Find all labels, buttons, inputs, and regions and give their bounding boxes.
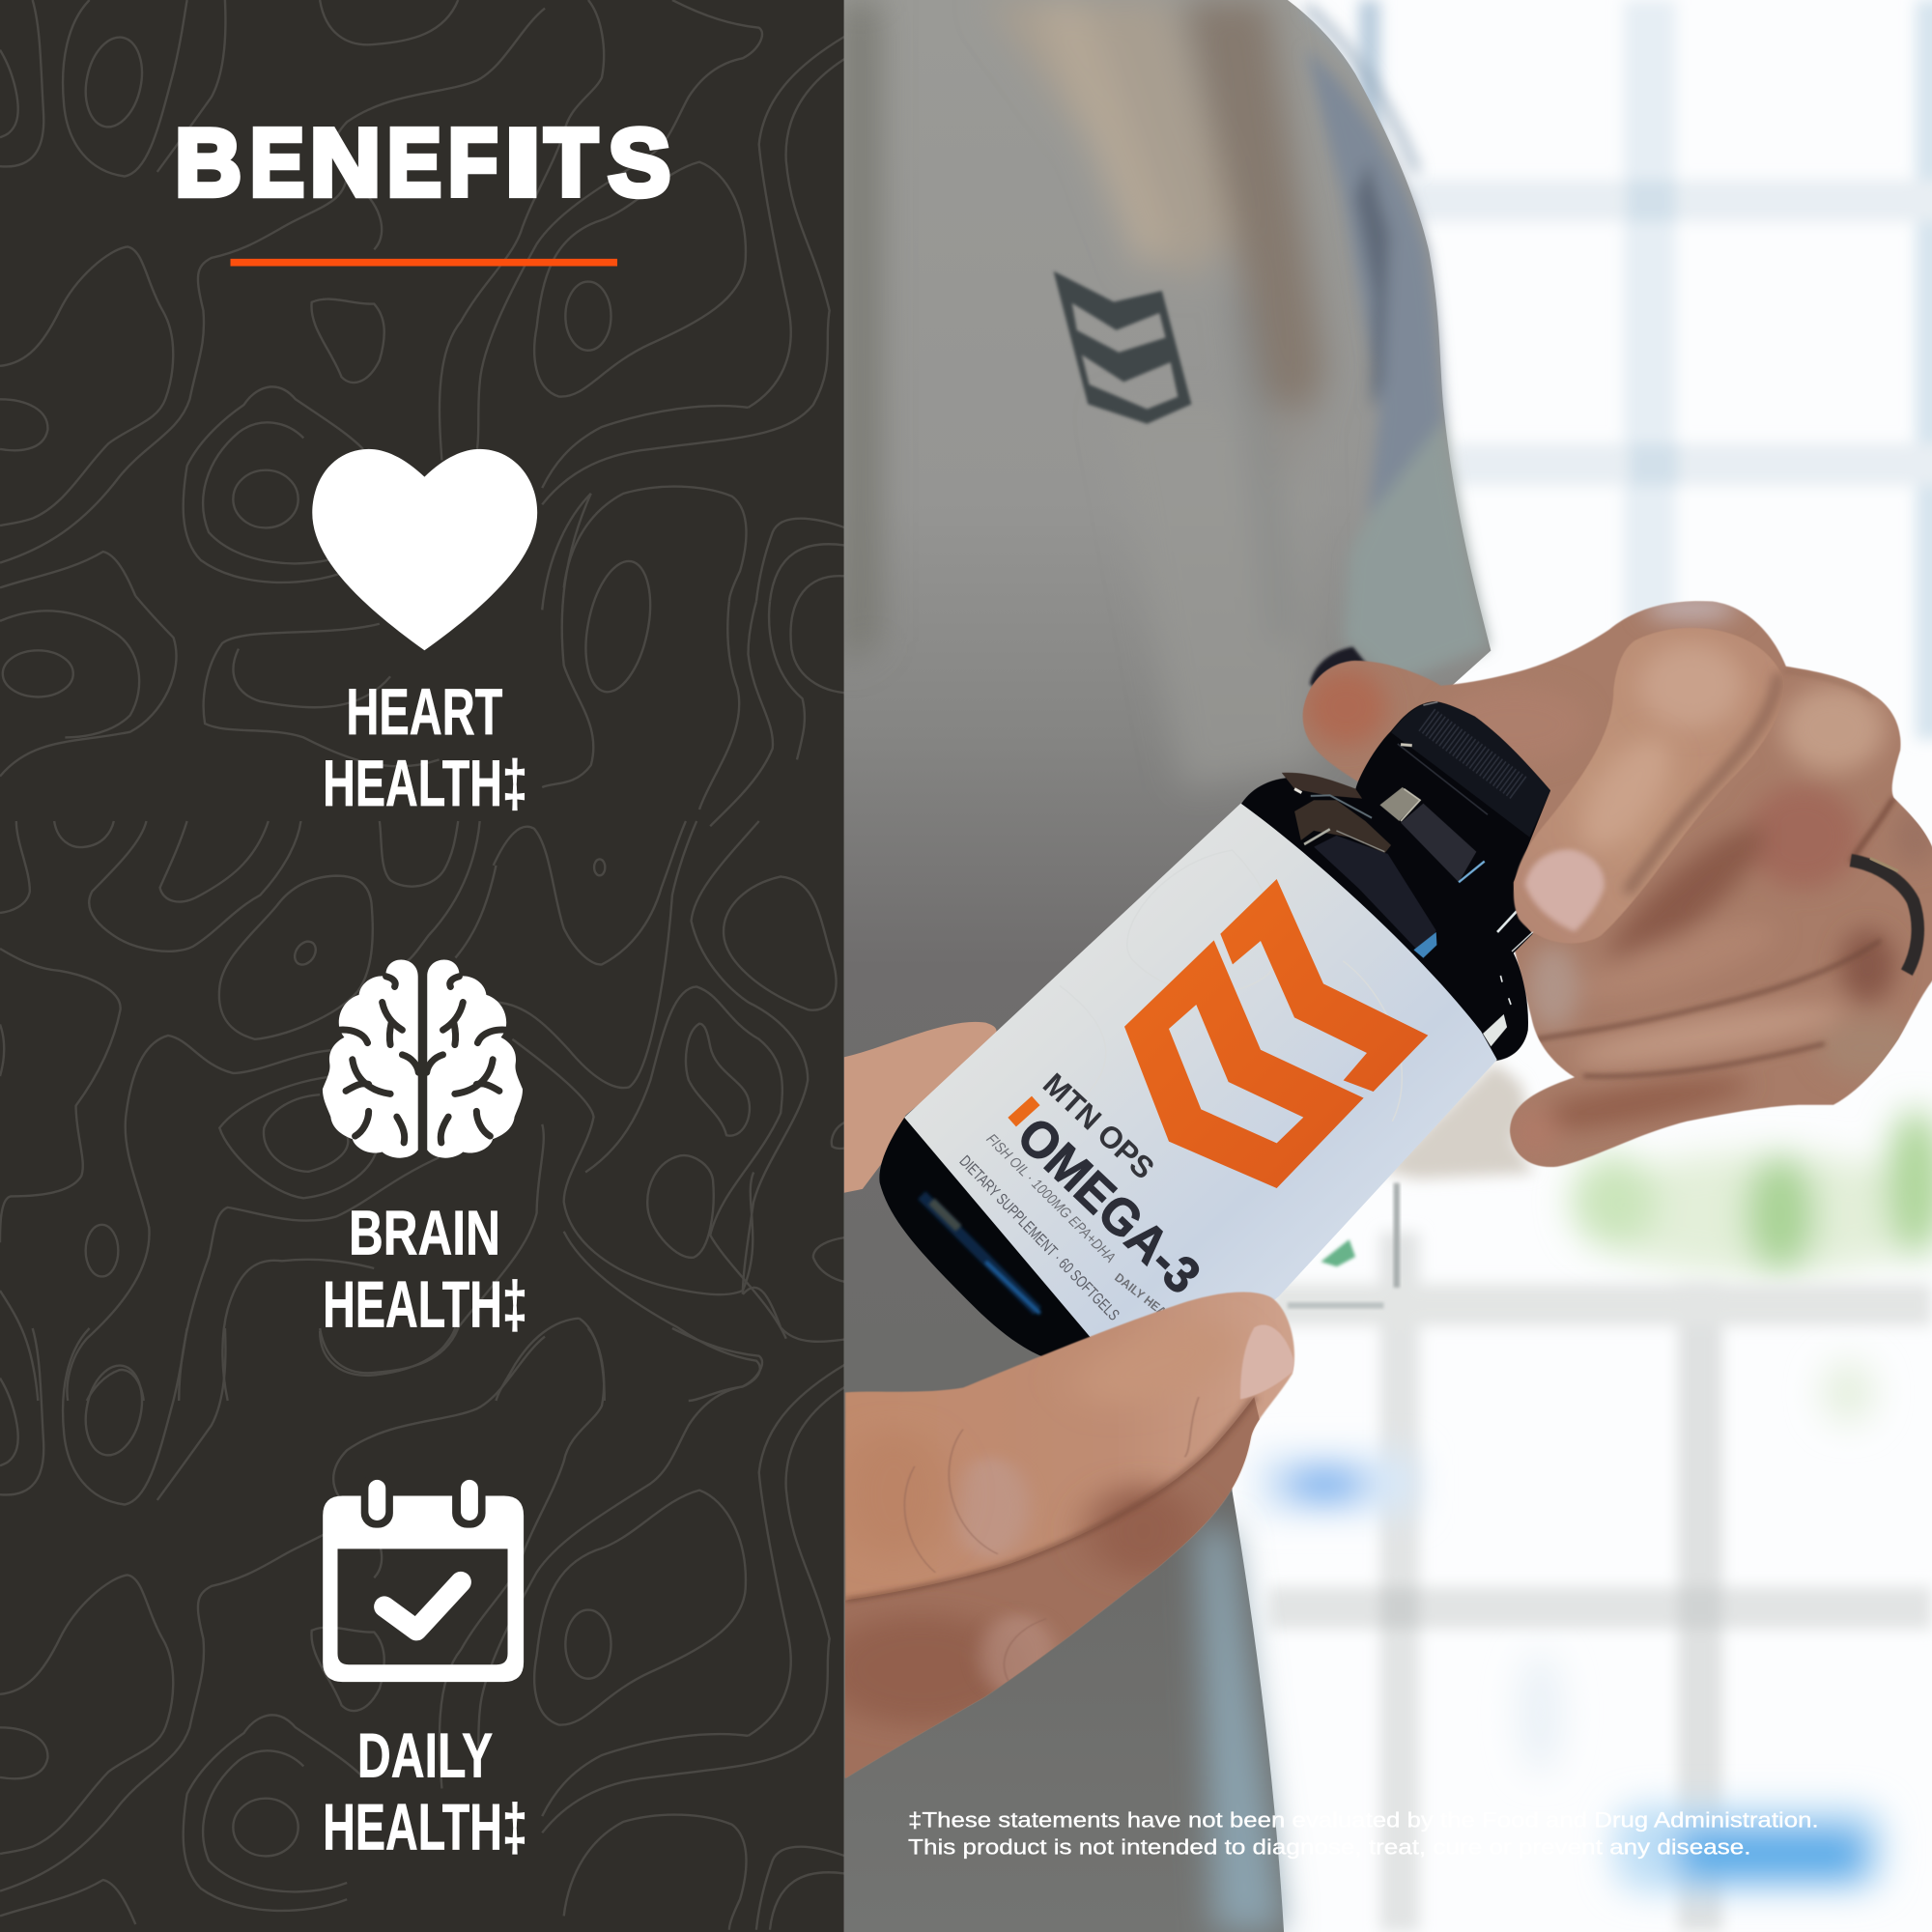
icon: heart bbox=[312, 449, 537, 650]
heading: BENEFITS: E bbox=[250, 109, 304, 215]
bottle shoulder glass bbox=[1282, 773, 1534, 1046]
label text: DAILY HEA bbox=[1112, 1270, 1170, 1320]
panel: benefits sidebar bbox=[0, 0, 850, 1932]
heading: BENEFITS: E bbox=[387, 109, 441, 215]
shirt bbox=[844, 0, 1491, 1932]
heading: BENEFITS: B bbox=[175, 109, 242, 215]
heading: BENEFITS: S bbox=[608, 109, 670, 215]
label: brain health: HEALTH‡ bbox=[323, 1269, 527, 1342]
label text: DIETARY SUPPLEMENT · 60 SOFTGELS bbox=[955, 1151, 1123, 1324]
label: daily health: HEALTH‡ bbox=[323, 1792, 527, 1864]
label: heart health: HEALTH‡ bbox=[323, 748, 527, 820]
left hand thumb bbox=[817, 1293, 1295, 1808]
logo: orange mark bbox=[1124, 879, 1428, 1188]
topographic contour background bbox=[0, 0, 850, 1930]
bottle body and cap bbox=[1241, 701, 1550, 1061]
window background bbox=[844, 0, 1932, 1932]
disclaimer text: This product is not intended to diagnose, treat, cure or prevent any disease. bbox=[908, 1835, 1750, 1860]
heading: BENEFITS: F bbox=[448, 109, 497, 215]
icon: brain bbox=[323, 959, 523, 1158]
label: daily health: DAILY bbox=[357, 1719, 493, 1790]
label: brain health bbox=[323, 1197, 527, 1342]
label text: OMEGA-3 bbox=[1006, 1107, 1210, 1305]
label text: MTN OPS bbox=[1037, 1066, 1161, 1186]
left hand fingers behind bottle bbox=[844, 1022, 997, 1193]
bottle neck bbox=[1379, 787, 1485, 882]
orange divider bbox=[231, 259, 617, 267]
bottle cap ribs bbox=[1391, 702, 1550, 838]
bottle lower glass bbox=[879, 1118, 1099, 1361]
right hand bbox=[1303, 597, 1932, 1167]
bottle label bbox=[904, 804, 1497, 1350]
label: heart health: HEART bbox=[346, 676, 502, 749]
heading: BENEFITS: T bbox=[545, 109, 598, 215]
shirt chest logo bbox=[1054, 271, 1191, 424]
wedding ring bbox=[1851, 858, 1918, 973]
heading: BENEFITS: N bbox=[310, 109, 381, 215]
panel: product photo bbox=[817, 0, 1932, 1932]
label: heart health bbox=[323, 676, 527, 820]
big finger and nail over cap bbox=[1514, 628, 1783, 944]
icon: calendar with check bbox=[323, 1474, 524, 1682]
label text: FISH OIL · 1000MG EPA+DHA bbox=[983, 1131, 1119, 1266]
heading: BENEFITS: I bbox=[504, 109, 541, 215]
label text bbox=[955, 1066, 1210, 1324]
label: brain health: BRAIN bbox=[349, 1197, 500, 1267]
disclaimer text: ‡These statements have not been evaluated by the Food and Drug Administration. bbox=[908, 1808, 1819, 1833]
label: daily health bbox=[323, 1719, 527, 1864]
wrist and sleeve cuff bbox=[1310, 647, 1534, 1179]
